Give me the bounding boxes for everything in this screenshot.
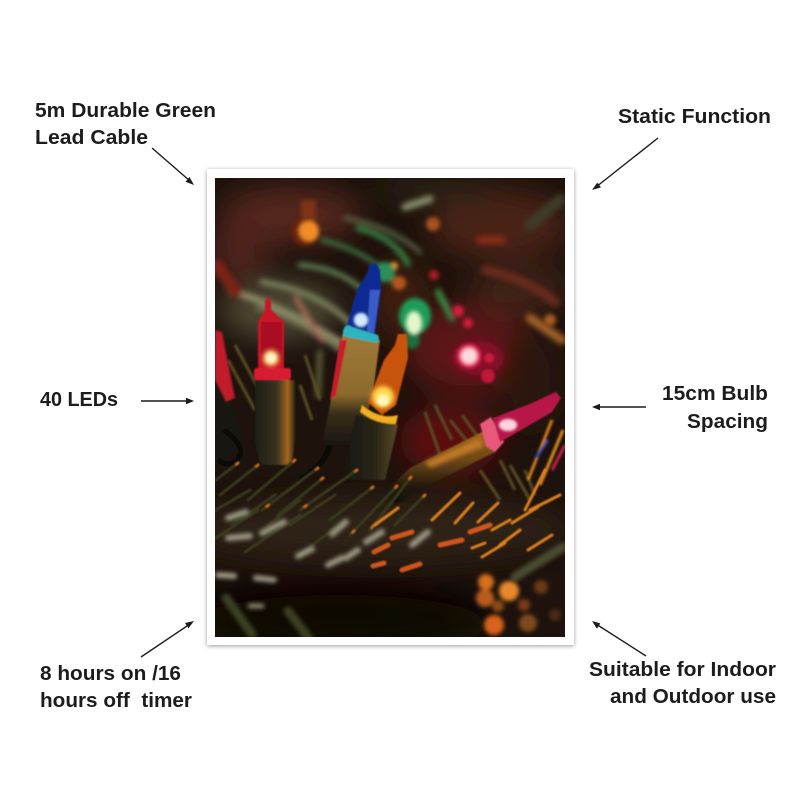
label: indoor and outdoor use: Suitable for Indoor: [589, 659, 776, 681]
label: indoor and outdoor use: and Outdoor use: [610, 686, 776, 708]
bulb: orange: [342, 334, 408, 480]
label: timer: 8 hours on /16: [40, 663, 181, 685]
mid needles behind bulbs: [228, 345, 535, 500]
arrow: indoor and outdoor use: [592, 621, 646, 656]
lower right bokeh: [476, 574, 561, 635]
arrow: static function: [592, 138, 658, 190]
photo: lights on a fir branch: [215, 178, 565, 637]
green glow: [399, 298, 431, 349]
background colour wash: [215, 178, 565, 608]
lower needles: [226, 547, 563, 637]
label: LED count: 40 LEDs: [40, 389, 118, 411]
lower dark foliage: [215, 579, 483, 637]
silver blurred needles: [218, 512, 428, 580]
panel: framed photo of multicoloured string lights: [190, 169, 574, 655]
arrow: bulb spacing: [592, 404, 646, 410]
left cropped red bulb: [215, 330, 235, 402]
label: bulb spacing: 15cm Bulb: [662, 383, 768, 405]
dark cable clip and loop: [216, 428, 333, 482]
blurred background needles: [217, 199, 562, 395]
arrow: cable: [152, 148, 194, 185]
pink glow: [452, 341, 504, 383]
bokeh lights: [291, 200, 556, 328]
label: cable: Lead Cable: [35, 127, 148, 149]
label: static function: Static Function: [618, 106, 771, 128]
bulb: pink: [385, 392, 561, 505]
label: cable: 5m Durable Green: [35, 100, 216, 122]
label: bulb spacing: Spacing: [687, 411, 768, 433]
foreground dark needles with orange tips: [216, 460, 560, 570]
arrow: LED count: [141, 398, 194, 404]
arrow: timer: [141, 621, 194, 657]
label: timer: hours off timer: [40, 690, 192, 712]
right edge reflected bulb: [528, 420, 565, 485]
bulb: red: [254, 297, 295, 465]
bulb: blue: [322, 263, 381, 445]
photo frame: [207, 169, 574, 645]
